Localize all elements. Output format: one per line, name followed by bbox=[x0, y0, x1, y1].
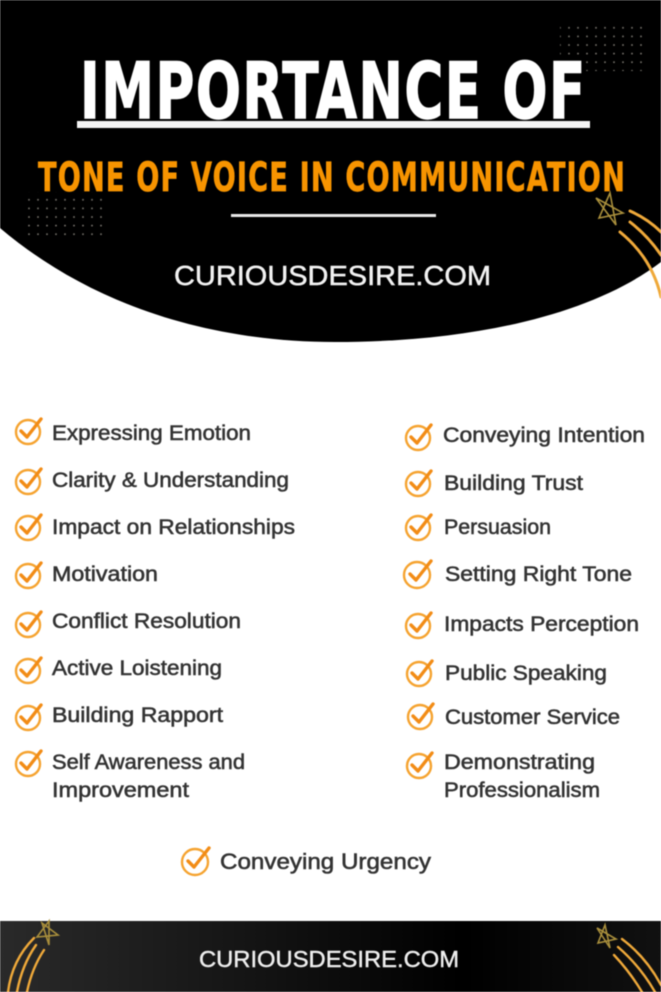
item: Conveying Intention: Conveying Intention bbox=[443, 424, 645, 447]
item: Setting Right Tone bbox=[404, 561, 632, 588]
title: IMPORTANCE OF bbox=[80, 45, 585, 137]
item: Motivation bbox=[16, 563, 158, 588]
footer band bbox=[0, 921, 661, 992]
item: Demonstrating Professionalism bbox=[407, 751, 600, 802]
item: Motivation: Motivation bbox=[52, 563, 158, 586]
header black arc bbox=[0, 0, 661, 342]
icon: star and streaks footer left bbox=[8, 921, 58, 992]
item: Demonstrating Professionalism: Demonstrating bbox=[444, 751, 595, 774]
dot pattern top right bbox=[560, 22, 648, 71]
item: Conflict Resolution: Conflict Resolution bbox=[52, 610, 241, 633]
icon: star and streaks top right bbox=[596, 193, 661, 297]
item: Impacts Perception: Impacts Perception bbox=[444, 613, 639, 636]
item: Self Awareness and Improvement bbox=[16, 751, 245, 802]
item: Impact on Relationships: Impact on Relationships bbox=[52, 516, 295, 539]
item: Customer Service: Customer Service bbox=[445, 706, 620, 729]
subtitle: TONE OF VOICE IN COMMUNICATION bbox=[38, 155, 625, 202]
divider line bbox=[231, 214, 436, 217]
item: Building Trust bbox=[406, 471, 583, 496]
item: Conflict Resolution bbox=[16, 610, 241, 637]
item: Building Rapport bbox=[16, 704, 223, 730]
item: Public Speaking: Public Speaking bbox=[445, 662, 607, 685]
item: Self Awareness and Improvement: Self Awareness and bbox=[52, 751, 245, 774]
item: Active Loistening: Active Loistening bbox=[52, 657, 222, 680]
item: Conveying Intention bbox=[406, 424, 645, 450]
item: Building Trust: Building Trust bbox=[444, 472, 583, 495]
header website url: CURIOUSDESIRE.COM bbox=[174, 260, 491, 291]
left checklist column bbox=[16, 419, 295, 802]
footer website url: CURIOUSDESIRE.COM bbox=[199, 946, 459, 972]
item: Persuasion bbox=[406, 515, 551, 540]
dot pattern left bbox=[24, 192, 104, 237]
item: Public Speaking bbox=[407, 661, 607, 686]
item: Persuasion: Persuasion bbox=[444, 516, 551, 539]
item: Building Rapport: Building Rapport bbox=[52, 704, 223, 727]
icon: star and streaks footer right bbox=[597, 925, 661, 992]
right checklist column bbox=[404, 424, 645, 802]
item: Active Loistening bbox=[16, 657, 222, 683]
item: Clarity & Understanding: Clarity & Understanding bbox=[52, 469, 289, 492]
item: Self Awareness and Improvement: Improvement bbox=[52, 779, 189, 802]
item: Demonstrating Professionalism: Professionalism bbox=[444, 779, 600, 802]
title underline bbox=[77, 121, 590, 128]
item: Conveying Urgency: Conveying Urgency bbox=[220, 849, 431, 874]
item: Expressing Emotion: Expressing Emotion bbox=[52, 422, 251, 445]
item: Setting Right Tone: Setting Right Tone bbox=[445, 563, 632, 586]
